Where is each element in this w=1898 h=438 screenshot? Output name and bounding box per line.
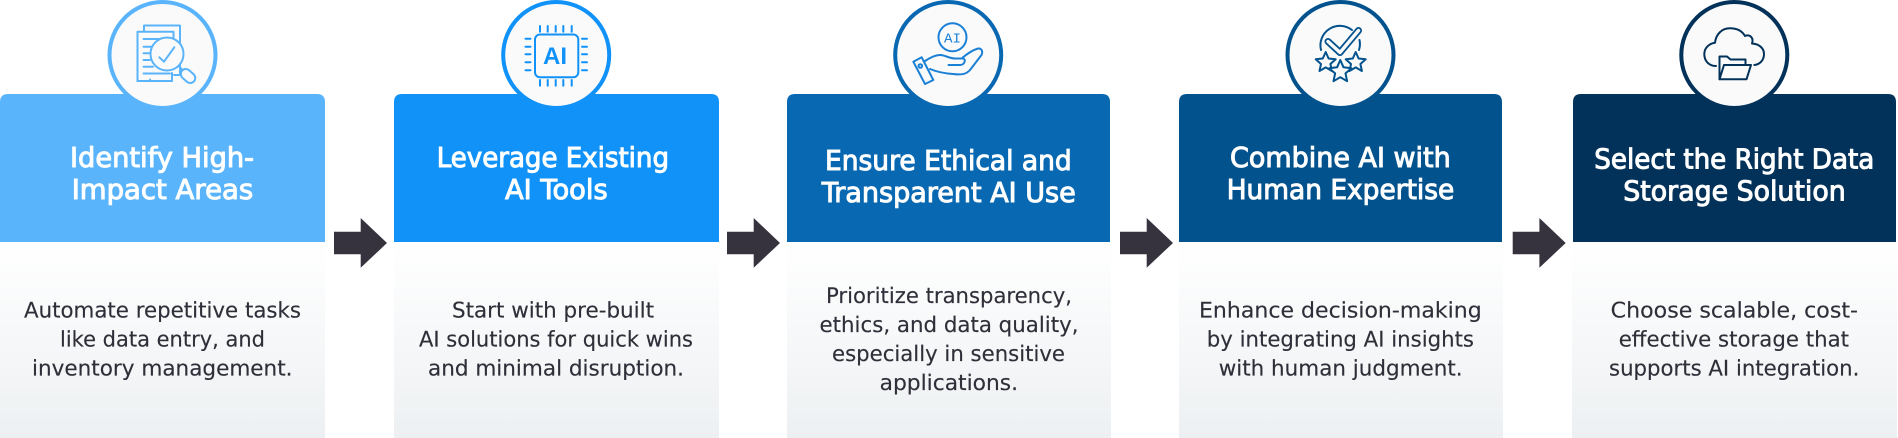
heading: AI Tools	[505, 174, 608, 206]
icon badge circle	[1288, 2, 1394, 108]
header band	[1179, 94, 1502, 242]
description text	[419, 298, 693, 382]
header band	[787, 94, 1110, 242]
icon badge circle	[1681, 2, 1787, 108]
header band	[394, 94, 719, 242]
heading: Select the Right Data	[1594, 144, 1874, 176]
body background	[1572, 242, 1897, 438]
description text	[1609, 298, 1859, 382]
heading	[437, 142, 669, 206]
icon badge circle	[895, 2, 1001, 108]
heading	[70, 142, 254, 206]
header band	[0, 94, 325, 242]
panel: step 1 identify high-impact areas	[0, 2, 325, 438]
body background	[787, 242, 1111, 438]
body background	[0, 242, 325, 438]
heading: Transparent AI Use	[821, 177, 1076, 209]
description text: Enhance decision-making	[1199, 298, 1482, 324]
description text: AI solutions for quick wins	[419, 328, 693, 352]
heading	[1594, 144, 1874, 208]
panel: step 2 leverage existing AI tools	[394, 2, 719, 438]
arrow 1	[334, 218, 387, 268]
description text: ethics, and data quality,	[820, 313, 1078, 338]
heading	[1227, 142, 1454, 206]
arrow 2	[727, 218, 780, 268]
description text: Start with pre-built	[452, 298, 654, 324]
description text	[820, 284, 1078, 396]
icon: hand holding AI: AI	[944, 32, 961, 48]
icon badge circle	[110, 2, 216, 108]
icon: hand holding AI	[913, 23, 982, 84]
icon: document with magnifier	[138, 26, 197, 85]
description text: applications.	[880, 371, 1018, 396]
description text: by integrating AI insights	[1207, 328, 1474, 352]
heading: Combine AI with	[1230, 142, 1451, 174]
description text: especially in sensitive	[832, 342, 1065, 367]
description text: supports AI integration.	[1609, 356, 1859, 382]
description text: Automate repetitive tasks	[24, 298, 301, 324]
description text: Prioritize transparency,	[826, 284, 1072, 309]
icon: cloud with folder	[1704, 28, 1764, 79]
arrow 3	[1120, 218, 1173, 268]
icon badge circle	[503, 2, 609, 108]
description text: effective storage that	[1619, 328, 1849, 352]
icon: AI chip: AI	[543, 43, 567, 70]
description text: like data entry, and	[60, 328, 265, 352]
body background	[1179, 242, 1503, 438]
heading: Ensure Ethical and	[825, 145, 1072, 177]
panel: step 3 ensure ethical and transparent AI use	[787, 2, 1111, 438]
description text	[1199, 298, 1482, 382]
header band	[1573, 94, 1896, 242]
panel: step 4 combine AI with human expertise	[1179, 2, 1503, 438]
body background	[394, 242, 719, 438]
heading: Human Expertise	[1227, 174, 1454, 206]
heading: Storage Solution	[1623, 176, 1846, 208]
heading	[821, 145, 1076, 209]
arrow 4	[1513, 218, 1566, 268]
heading: Leverage Existing	[437, 142, 669, 174]
icon: AI chip	[526, 26, 587, 86]
heading: Identify High-	[70, 142, 254, 174]
icon: check with three stars	[1316, 26, 1366, 81]
panel: step 5 select the right data storage solution	[1572, 2, 1897, 438]
description text	[24, 298, 301, 382]
description text: and minimal disruption.	[428, 356, 684, 382]
description text: with human judgment.	[1219, 356, 1463, 382]
heading: Impact Areas	[72, 174, 253, 206]
description text: Choose scalable, cost-	[1611, 298, 1858, 324]
description text: inventory management.	[32, 356, 292, 382]
